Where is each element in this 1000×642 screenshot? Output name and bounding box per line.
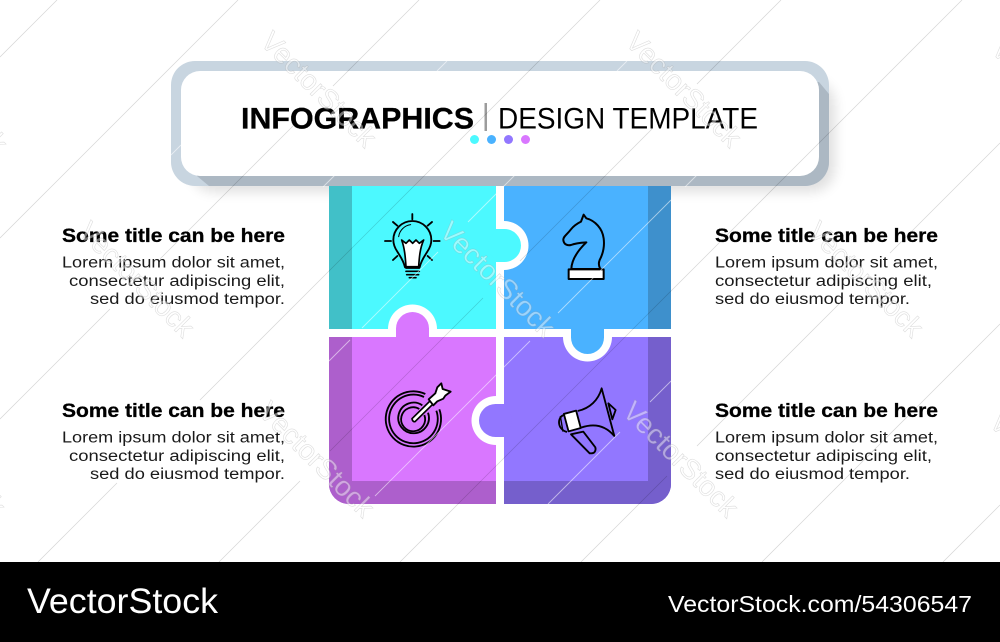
watermark overlay: VectorStock — [253, 395, 381, 524]
puzzle tab: magenta — [396, 312, 429, 345]
puzzle piece: blue — [500, 186, 671, 333]
text block: top left: Lorem ipsum dolor sit amet, — [62, 254, 285, 272]
watermark overlay: VectorStock — [73, 215, 201, 344]
text block: top left: sed do eiusmod tempor. — [90, 291, 285, 308]
puzzle tab: cyan — [488, 229, 521, 262]
header shadow — [190, 80, 835, 192]
text block: bottom left — [62, 400, 285, 483]
text block: bottom right: consectetur adipiscing elit, — [715, 448, 932, 465]
text block: bottom right: Some title can be here — [715, 400, 938, 422]
text block: bottom right: Lorem ipsum dolor sit amet, — [715, 430, 938, 446]
icon: megaphone — [559, 388, 616, 453]
text block: bottom left: consectetur adipiscing elit, — [69, 448, 285, 465]
text block: top left: Some title can be here — [62, 225, 285, 247]
text block: bottom right: sed do eiusmod tempor. — [715, 466, 910, 483]
icon: chess knight — [563, 215, 604, 279]
watermark overlay: VectorStock — [255, 25, 383, 154]
title: infographics: INFOGRAPHICS — [241, 102, 474, 136]
footer bar — [0, 562, 1000, 642]
header banner — [171, 61, 829, 186]
text block: top right: consectetur adipiscing elit, — [715, 273, 932, 290]
footer image id: VectorStock.com/54306547 — [668, 591, 972, 617]
text block: bottom right — [715, 400, 938, 483]
text block: bottom left: Some title can be here — [62, 400, 285, 422]
puzzle tab: violet — [479, 404, 512, 437]
text block: bottom left: sed do eiusmod tempor. — [90, 466, 285, 483]
puzzle piece: cyan — [329, 186, 500, 333]
text block: top right: Lorem ipsum dolor sit amet, — [715, 254, 938, 272]
puzzle piece: magenta — [329, 333, 500, 504]
title: design template: DESIGN TEMPLATE — [498, 102, 758, 136]
watermark overlay: VectorStock — [617, 395, 745, 524]
text block: top right: sed do eiusmod tempor. — [715, 291, 910, 308]
colour dots — [470, 135, 530, 144]
puzzle tab: blue — [571, 321, 604, 354]
icon: target with arrow — [386, 383, 451, 447]
puzzle piece: violet — [500, 333, 671, 504]
text block: top left — [62, 225, 285, 308]
watermark overlay: VectorStock — [434, 215, 562, 344]
title separator — [484, 103, 487, 131]
watermark overlay: VectorStock — [802, 215, 930, 344]
icon: light bulb — [385, 214, 440, 278]
text block: top right — [715, 225, 938, 308]
text block: bottom left: Lorem ipsum dolor sit amet, — [62, 430, 285, 446]
puzzle — [327, 186, 673, 506]
watermark overlay: VectorStock — [620, 25, 748, 154]
footer logo text: VectorStock — [27, 582, 219, 621]
text block: top left: consectetur adipiscing elit, — [69, 273, 285, 290]
text block: top right: Some title can be here — [715, 225, 938, 247]
